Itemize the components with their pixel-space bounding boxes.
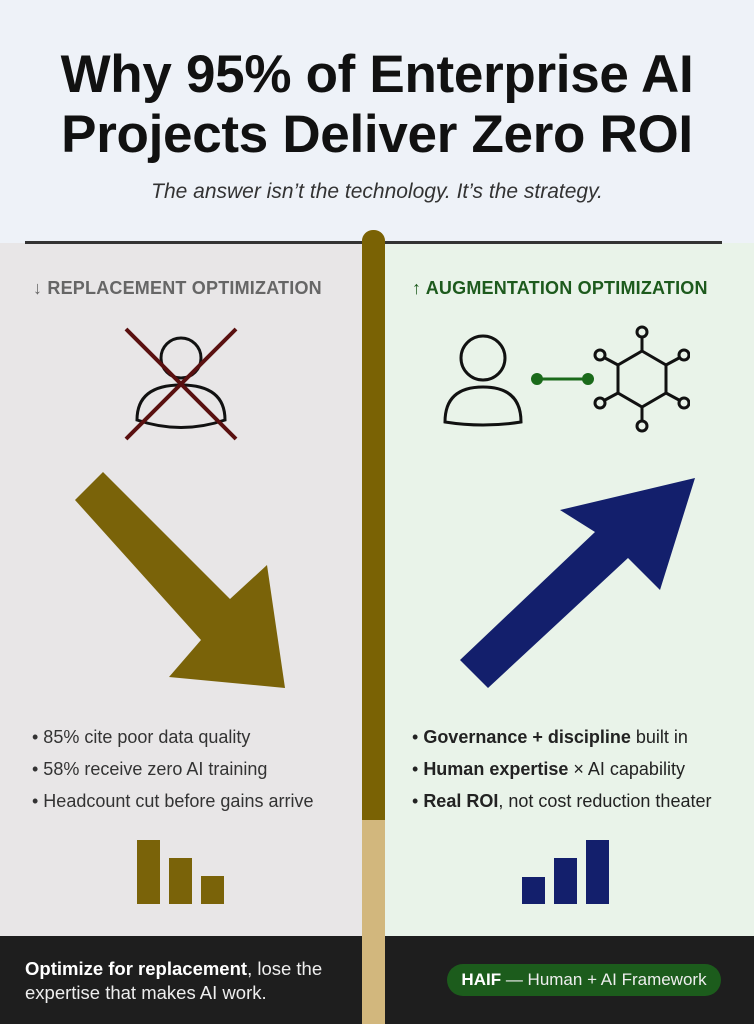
center divider bar xyxy=(362,230,385,1024)
chart: rising bars xyxy=(522,840,609,904)
badge: HAIF: HAIF — Human + AI Framework xyxy=(461,970,707,989)
title xyxy=(60,45,693,164)
footer text: replacement xyxy=(25,958,322,1003)
bullets: augmentation: • Human expertise × AI capability xyxy=(412,759,685,779)
heading: augmentation: ↑ AUGMENTATION OPTIMIZATION xyxy=(412,278,708,298)
right panel xyxy=(385,243,754,936)
arrow: up xyxy=(460,478,695,688)
footer text: replacement: expertise that makes AI work. xyxy=(25,982,267,1003)
left panel xyxy=(0,243,362,936)
arrow: down xyxy=(75,472,285,688)
footer text: replacement: Optimize for replacement, lose the xyxy=(25,958,322,979)
chart: declining bars xyxy=(137,840,224,904)
title: Why 95% of Enterprise AI xyxy=(61,45,693,104)
header background xyxy=(0,0,754,243)
footer right xyxy=(385,936,754,1024)
icon: person connected to AI network xyxy=(444,326,690,432)
icon: crossed-out person xyxy=(124,328,238,440)
bullets: augmentation: • Governance + discipline built in xyxy=(412,727,688,747)
footer left xyxy=(0,936,362,1024)
subtitle: The answer isn’t the technology. It’s the strategy. xyxy=(151,180,603,203)
bullets: augmentation xyxy=(412,727,712,811)
bullets: augmentation: • Real ROI, not cost reduction theater xyxy=(412,791,711,811)
heading: replacement: ↓ REPLACEMENT OPTIMIZATION xyxy=(33,278,322,298)
title: Projects Deliver Zero ROI xyxy=(61,105,693,164)
bullets: replacement: • 85% cite poor data quality xyxy=(32,727,250,747)
bullets: replacement xyxy=(32,727,313,811)
badge: HAIF xyxy=(447,964,721,996)
bullets: replacement: • 58% receive zero AI training xyxy=(32,759,267,779)
bullets: replacement: • Headcount cut before gains arrive xyxy=(32,791,313,811)
